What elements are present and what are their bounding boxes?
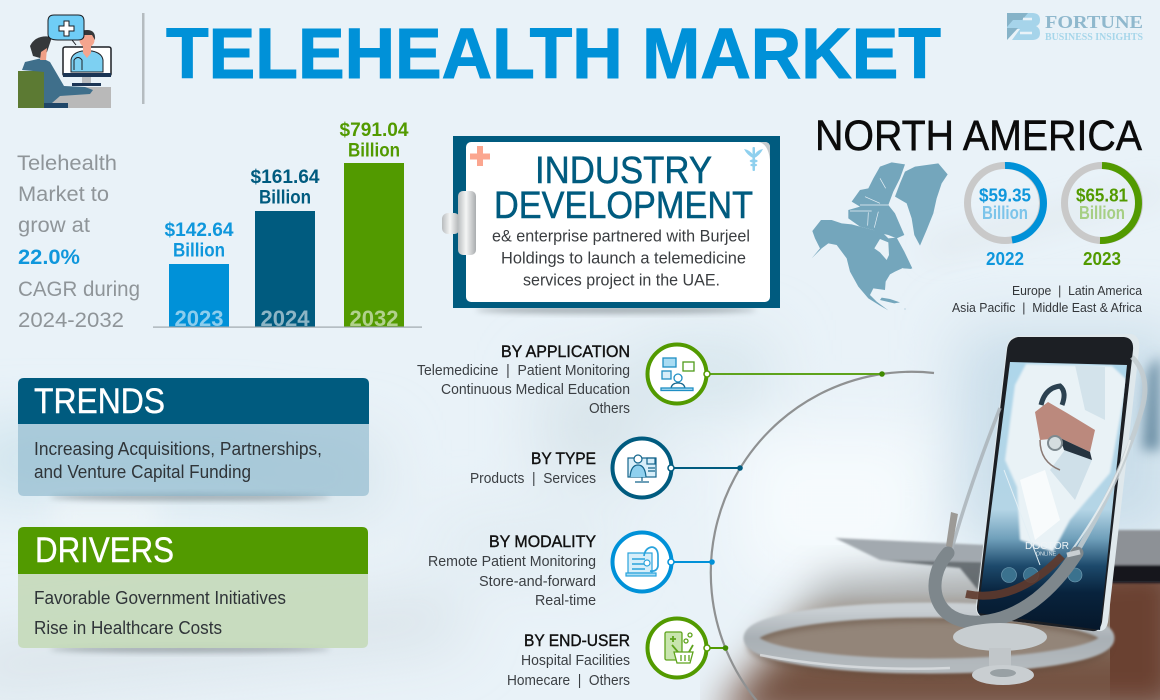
segment: by application: BY APPLICATION (501, 343, 630, 361)
CAGR text block: grow at (18, 213, 90, 237)
segment: by modality: BY MODALITY (489, 533, 596, 551)
title: TELEHEALTH MARKET (166, 15, 941, 94)
segment: by end-user: BY END-USER (524, 632, 630, 650)
text: partnership description: services project in the UAE. (523, 270, 720, 290)
heading: industry development: DEVELOPMENT (494, 185, 753, 227)
CAGR text block: Market to (18, 182, 109, 206)
segment: by type (470, 438, 743, 498)
bar 2024: 2024 (260, 306, 310, 331)
heading: industry development (494, 150, 753, 227)
bar 2023 (164, 220, 234, 331)
bar chart (153, 120, 422, 331)
bar 2023: Billion (173, 240, 225, 262)
header divider (142, 13, 144, 104)
logo: Fortune Business Insights: BUSINESS INSIGHTS (1045, 32, 1143, 43)
icon: caduceus (744, 147, 763, 171)
text: partnership description (492, 226, 750, 290)
icon: stethoscope tubes and chest piece (935, 357, 1145, 685)
background photo (0, 310, 1160, 700)
text: partnership description: Holdings to launch a telemedicine (501, 248, 746, 268)
panel: trends: TRENDS (34, 382, 165, 421)
segment: by application (417, 343, 885, 417)
CAGR text block (17, 151, 140, 332)
bar 2032 (340, 120, 409, 331)
panel: trends: Increasing Acquisitions, Partnerships, (34, 439, 322, 459)
CAGR text block: 2024-2032 (18, 308, 124, 332)
CAGR text block: Telehealth (17, 151, 117, 175)
donut: 2022 (968, 165, 1043, 269)
segment: by application: Telemedicine | Patient Monitoring (417, 363, 630, 379)
segment: by type: Products | Services (470, 471, 596, 487)
segment: by end-user: Homecare | Others (507, 673, 630, 689)
segment: by application: Others (589, 401, 630, 417)
panel: trends: and Venture Capital Funding (34, 462, 251, 482)
donut: 2023: Billion (1079, 203, 1125, 223)
text: partnership description: e& enterprise partnered with Burjeel (492, 226, 750, 246)
bar 2023: $142.64 (164, 220, 234, 241)
panel: drivers: DRIVERS (35, 531, 174, 570)
icon: doctor on monitor (628, 455, 656, 482)
segment: by type: BY TYPE (531, 450, 596, 468)
icon: clipboard clip (442, 191, 476, 255)
phone screen sublabel: ONLINE (1036, 552, 1057, 558)
segment: by end-user (507, 618, 728, 689)
icon: telemedicine laptop (661, 358, 694, 390)
arc connecting segments (711, 372, 934, 700)
bar 2024 (250, 167, 320, 331)
panel: drivers: Rise in Healthcare Costs (34, 618, 222, 638)
panel: drivers: Favorable Government Initiatives (34, 588, 286, 608)
donut: 2022: $59.35 (979, 186, 1031, 206)
text: other regions: Asia Pacific | Middle East & Africa (952, 300, 1143, 315)
panel: trends (18, 378, 369, 501)
segment: by modality: Remote Patient Monitoring (428, 554, 596, 570)
phone call buttons (1002, 568, 1082, 582)
segment: by modality: Real-time (535, 593, 596, 609)
panel: industry development clipboard (442, 136, 780, 314)
bar 2024: Billion (259, 188, 311, 208)
donut: 2022: 2022 (986, 249, 1024, 269)
phone photo (976, 334, 1139, 631)
segment: by modality: Store-and-forward (479, 574, 596, 590)
bar 2032: $791.04 (340, 120, 409, 141)
heading: industry development: INDUSTRY (535, 150, 712, 192)
text: other regions: Europe | Latin America (1012, 283, 1143, 298)
panel: drivers (18, 527, 368, 653)
illustration: patient on video call with doctor (18, 15, 111, 108)
icon: remote monitoring checklist (626, 547, 658, 576)
CAGR text block: CAGR during (18, 277, 140, 301)
segment: by end-user: Hospital Facilities (521, 653, 630, 669)
icon: stethoscope ring on table (751, 610, 1107, 674)
CAGR text block: 22.0% (18, 245, 80, 269)
logo: Fortune Business Insights: FORTUNE (1045, 12, 1143, 32)
bar 2023: 2023 (174, 306, 224, 331)
segment: by modality (428, 532, 715, 609)
bar 2024: $161.64 (250, 167, 320, 188)
text: other regions (952, 283, 1143, 315)
icon: homecare basket (665, 632, 693, 663)
donut: 2023 (1064, 166, 1140, 269)
donut: 2022: Billion (982, 203, 1028, 223)
bar 2032: 2032 (350, 306, 398, 331)
segment: by application: Continuous Medical Education (441, 382, 630, 398)
phone screen label: DOCTOR (1025, 540, 1069, 552)
bar 2032: Billion (348, 140, 400, 162)
map: north america (812, 162, 948, 310)
donut: 2023: $65.81 (1076, 186, 1128, 206)
icon: medical cross (470, 146, 490, 166)
donut: 2023: 2023 (1083, 249, 1121, 269)
logo: Fortune Business Insights (1007, 12, 1143, 43)
